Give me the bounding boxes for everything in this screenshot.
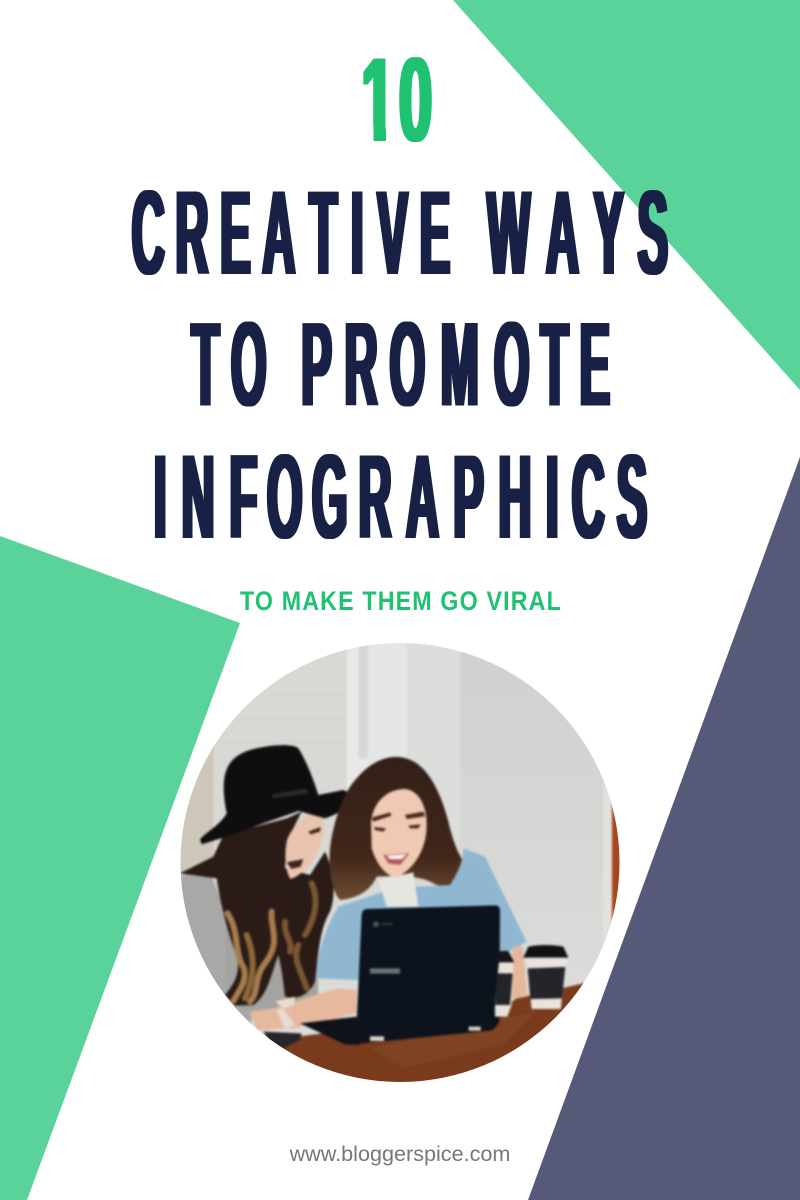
photo watch [275, 997, 295, 1029]
photo left coffee cup [495, 951, 514, 1017]
photo table reflection [370, 1012, 537, 1068]
photo right woman shirt [317, 848, 527, 980]
title line: infographics: INFOGRAPHICS [154, 431, 647, 564]
title line: to promote: TO PROMOTE [192, 298, 610, 432]
photo phone on table [263, 1032, 302, 1048]
photo wall [180, 643, 620, 1037]
photo left woman hair highlights [227, 883, 315, 1002]
title number: 10: 10 [361, 33, 432, 168]
photo left woman sweater front [226, 940, 320, 1012]
photo right woman hair [330, 757, 467, 900]
shape: top right green triangle [453, 0, 800, 390]
photo right woman turtleneck [378, 872, 418, 907]
photo hat band [272, 788, 308, 798]
shape: right slate panel [528, 457, 800, 1200]
photo arms [250, 988, 357, 1030]
photo: two women at a laptop [180, 643, 620, 1082]
photo right coffee cup [523, 945, 568, 1009]
shape: left green panel [0, 536, 240, 1200]
title line: creative ways: CREATIVE WAYS [132, 167, 668, 300]
photo right woman features [372, 812, 425, 832]
subtitle: TO MAKE THEM GO VIRAL [240, 586, 561, 616]
photo table [277, 982, 584, 1082]
photo left woman sweater [181, 874, 253, 1024]
photo left woman face [285, 808, 323, 879]
photo left woman features [287, 827, 321, 869]
photo left woman hair [180, 812, 334, 1006]
photo right woman face [371, 789, 427, 878]
photo left woman hat [200, 745, 355, 844]
website url: www.bloggerspice.com [289, 1141, 510, 1166]
photo laptop [300, 905, 500, 1045]
